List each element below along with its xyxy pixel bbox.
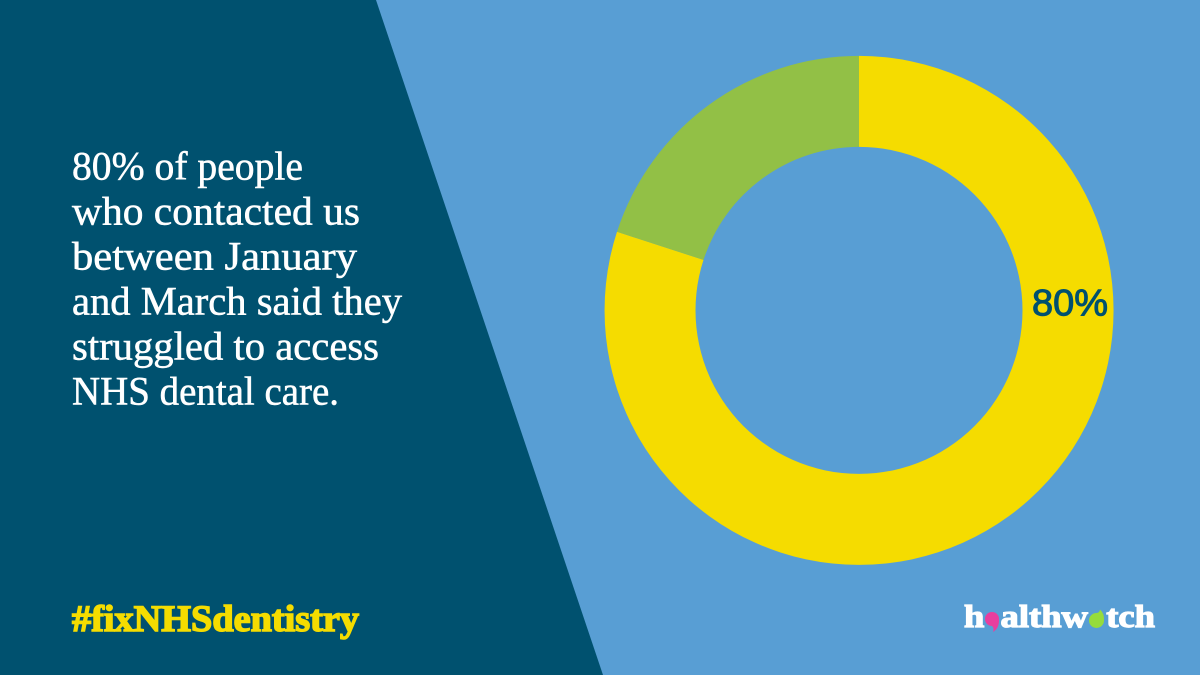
text block: main statement: who contacted us (72, 188, 360, 234)
text block: main statement: and March said they (72, 278, 402, 324)
logo: healthwatch (964, 598, 1155, 634)
logo wordmark: healthw atch (964, 598, 1155, 634)
logo accent: pink comma (985, 612, 999, 632)
hashtag: #fixNHSdentistry (72, 599, 360, 640)
text block: main statement (72, 144, 402, 414)
donut segment: green 20% (617, 56, 859, 260)
panel: dark teal slanted left panel (0, 0, 603, 675)
donut label: 80%: 80% (1032, 282, 1108, 323)
text block: main statement: struggled to access (72, 324, 379, 368)
donut chart (605, 56, 1114, 565)
text block: main statement: between January (72, 234, 357, 278)
text block: main statement: NHS dental care. (72, 368, 339, 414)
donut segment: yellow 80% (605, 56, 1114, 565)
logo accent: green comma (1089, 610, 1104, 628)
text block: main statement: 80% of people (72, 144, 303, 188)
